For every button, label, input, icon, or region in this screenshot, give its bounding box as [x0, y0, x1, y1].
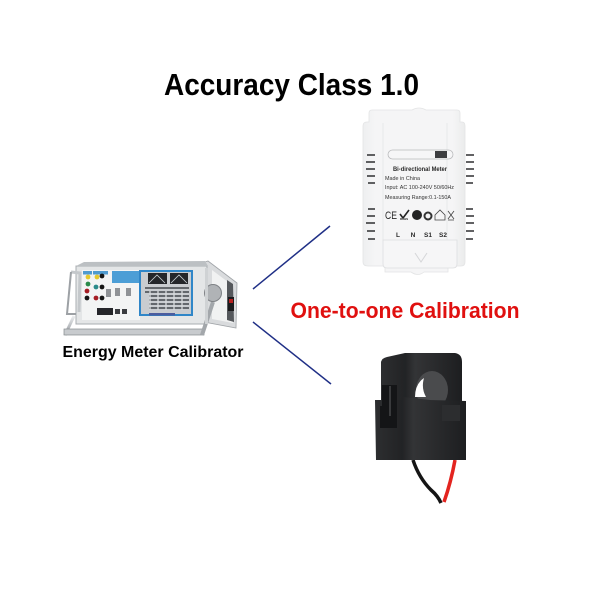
- terminal labels: S1: [424, 232, 432, 239]
- core aperture: [416, 371, 448, 409]
- callout: one-to-one calibration: One-to-one Calibration: [290, 298, 520, 323]
- blue display panel: [112, 271, 140, 283]
- upper core: [381, 353, 462, 401]
- terminal labels: [396, 232, 447, 239]
- certification marks: [385, 210, 454, 222]
- terminal labels: S2: [439, 232, 447, 239]
- handles and stand: [71, 272, 80, 312]
- icon: bi-directional meter: [363, 108, 474, 274]
- connector line: calibrator to meter: [253, 226, 330, 289]
- terminal panel: [83, 271, 92, 274]
- lower housing: [375, 397, 466, 460]
- calibrator label: Energy Meter Calibrator: [62, 344, 244, 361]
- red wire: [444, 460, 455, 502]
- black wire: [413, 460, 441, 503]
- icon: split-core current transformer: [375, 353, 466, 503]
- vent slots: [366, 155, 474, 239]
- terminal labels: L: [396, 232, 400, 239]
- slide switch window: [388, 150, 453, 159]
- title: Accuracy Class 1.0: [164, 67, 419, 102]
- switches and ports: [106, 289, 111, 297]
- certification marks: CE: [385, 210, 397, 222]
- connector line: calibrator to current transformer: [253, 322, 331, 384]
- icon: bi-directional meter: Input: AC 100-240V 50/60Hz: [385, 185, 454, 191]
- icon: bi-directional meter: Measuring Range:0.1-150A: [385, 195, 451, 201]
- chassis front panel: [76, 266, 207, 324]
- chassis side panel: [204, 261, 237, 328]
- meter label text: Bi-directional Meter: [393, 166, 448, 173]
- certification marks: RoHS: [400, 217, 408, 221]
- terminal labels: N: [411, 232, 416, 239]
- icon: bi-directional meter: Made in China: [385, 176, 421, 182]
- clip details: [380, 385, 397, 428]
- meter body: [363, 108, 465, 274]
- icon: energy meter calibrator device: [64, 261, 237, 335]
- terminal cover: [383, 240, 457, 268]
